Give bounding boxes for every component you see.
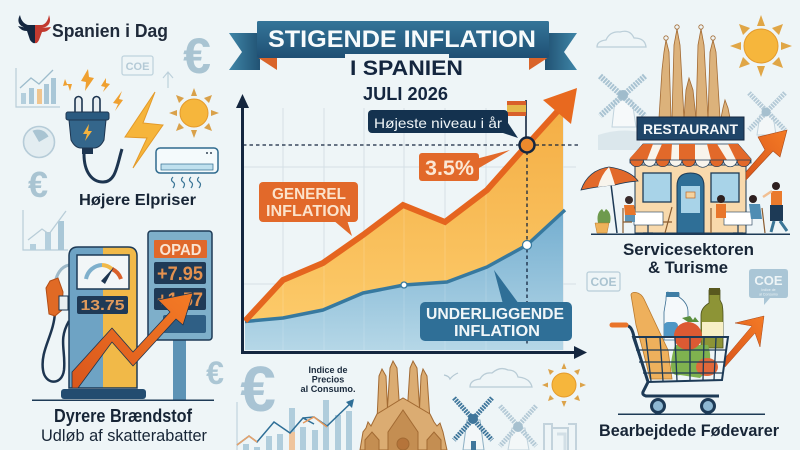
icon: windmill left [600, 76, 645, 127]
icon: price sign: OPAD [160, 242, 202, 259]
marker: underlying, peak [522, 240, 532, 250]
icon: windmill right [749, 93, 785, 135]
icon: sun [169, 88, 219, 138]
title banner [229, 21, 577, 104]
icon: COE badge left: COE [590, 275, 617, 289]
panel: Bearbejdede Fødevarer [587, 269, 788, 440]
icon: sun [730, 15, 792, 77]
chart: inflation [236, 88, 587, 359]
icon: cart wheels [652, 400, 714, 412]
icon: cloud [470, 369, 532, 387]
ribbon [229, 21, 577, 70]
icon: awning [630, 144, 751, 167]
callout: UNDERLIGGENDE INFLATION [420, 270, 572, 341]
icon: price sign: +7.95 [157, 264, 203, 285]
hills [598, 131, 640, 150]
icon: COE badge right [749, 269, 788, 305]
heading: Bearbejdede Fødevarer: Bearbejdede Fødevarer [599, 421, 779, 440]
area: underlying inflation [245, 212, 563, 350]
logo: Spanien i Dag [18, 15, 168, 43]
icon: bird [444, 373, 458, 379]
icon: euro middle: € [28, 164, 48, 205]
icon: Sagrada Familia [659, 25, 730, 118]
heading: & Turisme: & Turisme [648, 258, 728, 277]
area: general inflation [245, 108, 563, 320]
icon: small bar chart [16, 68, 60, 107]
text: Indice de Precios al Consumo [300, 365, 356, 394]
text: Udløb af skatterabatter: Udløb af skatterabatter [41, 426, 207, 445]
axes [236, 94, 587, 359]
icon: cloud [597, 31, 646, 47]
dashed guide lines [243, 145, 578, 346]
icon: COE badge left [587, 272, 620, 291]
ground line [591, 234, 790, 235]
heading: Dyrere Brændstof: Dyrere Brændstof [54, 406, 193, 426]
ground line [32, 400, 214, 401]
icon: diners and tables [623, 195, 765, 233]
logo text: Spanien i Dag [52, 21, 168, 41]
icon: windmill blue [454, 398, 492, 450]
callout: Højeste niveau i år [368, 110, 518, 138]
line: underlying inflation [245, 210, 565, 322]
icon: parasol [581, 167, 638, 233]
callout: UNDERLIGGENDE INFLATION: UNDERLIGGENDE [426, 306, 564, 323]
icon: fuel pump: 13.75 [80, 297, 124, 314]
callout: GENEREL INFLATION [259, 182, 358, 236]
text: JULI 2026: JULI 2026 [363, 84, 448, 104]
icon: groceries [631, 288, 723, 379]
grid lines [243, 108, 576, 350]
icon: shopping cart [612, 325, 728, 396]
icon: windmill pale [500, 406, 536, 450]
callout: 3.5% [419, 150, 510, 181]
panel: Højere Elpriser [63, 69, 219, 209]
arrow: rising services [746, 130, 787, 180]
icon: air conditioner [156, 148, 218, 188]
icon: potted plant [595, 209, 610, 233]
icon: euro lower: € [206, 355, 224, 391]
icon: restaurant building [635, 165, 746, 233]
sign: RESTAURANT [637, 117, 744, 140]
icon: plug [66, 97, 122, 182]
icon: fuel pump [61, 247, 146, 399]
marker: general peak with flag [507, 100, 534, 152]
panel: Dyrere Brændstof [32, 231, 214, 445]
grid overlay [283, 190, 486, 350]
heading: I SPANIEN: I SPANIEN [350, 57, 463, 80]
heading: Servicesektoren: Servicesektoren [623, 240, 754, 259]
line: general inflation arrow [245, 88, 577, 321]
icon: bull head [18, 15, 51, 43]
marker: underlying, mid [401, 282, 407, 288]
icon: price sign: +1.57 [157, 290, 203, 311]
bottom strip decorations [237, 353, 586, 450]
ground line [618, 414, 765, 415]
icon: small sun [542, 363, 586, 407]
text: Indice de Precios al Consumo: al Consumo. [300, 384, 356, 394]
text: Indice de Precios al Consumo: Indice de [308, 365, 348, 375]
icon: fuel hose and nozzle [43, 265, 69, 382]
chart: small bars and trend [237, 399, 354, 450]
icon: COE badge: COE [126, 61, 149, 73]
panel: Servicesektoren & Turisme [581, 15, 792, 277]
icon: sparks [63, 69, 123, 111]
icon: euro top: € [183, 28, 211, 84]
icon: COE badge right: COE [754, 273, 783, 288]
icon: small up arrow [163, 72, 173, 88]
callout: GENEREL INFLATION: GENEREL [272, 186, 346, 203]
callout: Højeste niveau i år: Højeste niveau i år [374, 115, 502, 131]
icon: COE badge right: Indice de [761, 288, 776, 292]
icon: small chart two [23, 210, 68, 250]
icon: clock pie [24, 125, 54, 158]
arrow: rising food prices [725, 316, 764, 367]
text: Indice de Precios al Consumo: Precios [312, 374, 344, 384]
callout: GENEREL INFLATION: INFLATION [266, 203, 351, 220]
callout: 3.5%: 3.5% [425, 157, 474, 180]
icon: Sagrada Familia [360, 361, 447, 450]
callout: UNDERLIGGENDE INFLATION: INFLATION [454, 323, 540, 340]
sign: RESTAURANT: RESTAURANT [643, 121, 738, 137]
decorative icons: left column [16, 28, 224, 391]
icon: castle ruins [544, 424, 576, 450]
icon: COE badge [122, 56, 153, 75]
heading: Højere Elpriser: Højere Elpriser [79, 192, 196, 209]
icon: lightning bolt [125, 92, 163, 168]
icon: COE badge right: al Consumo [759, 292, 778, 296]
icon: price sign [148, 231, 212, 400]
arrow: rising fuel price [72, 293, 193, 388]
heading: STIGENDE INFLATION: STIGENDE INFLATION [268, 26, 536, 53]
icon: waiter [763, 182, 787, 232]
icon: large euro: € [240, 353, 276, 425]
